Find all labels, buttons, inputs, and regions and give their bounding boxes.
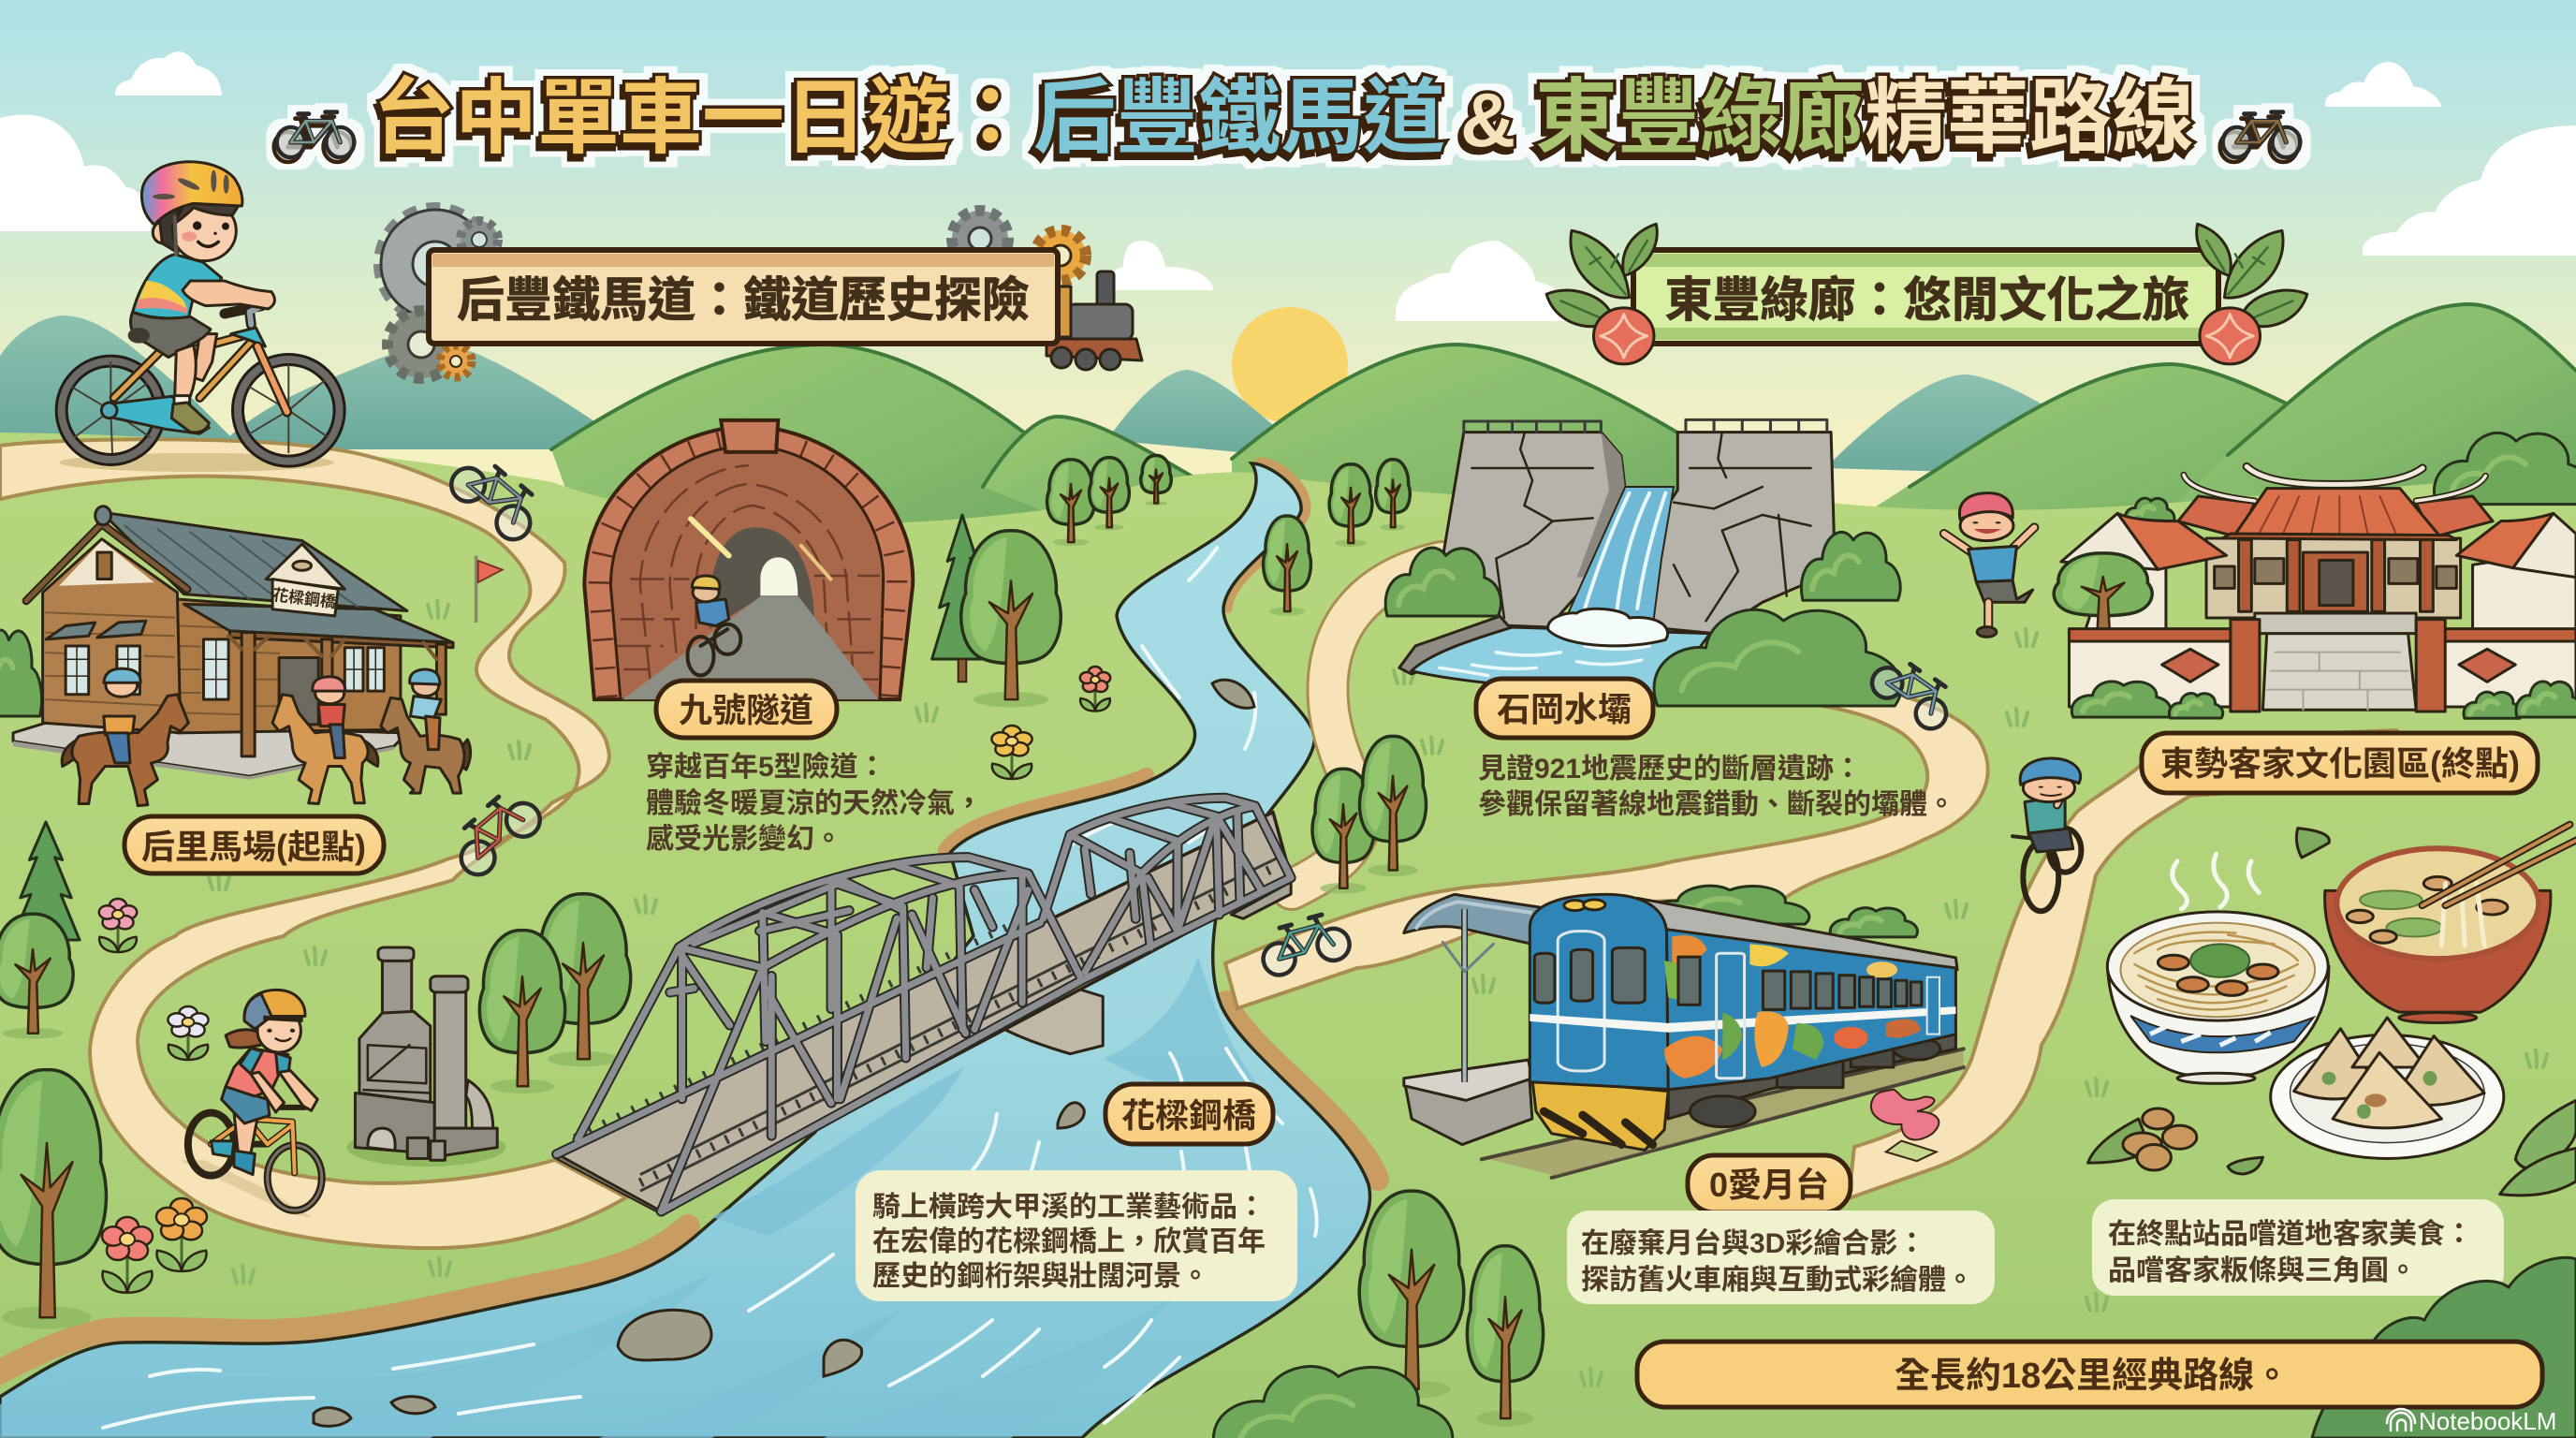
title: 台中單車一日遊： [373, 71, 1032, 164]
shorts [131, 312, 211, 358]
background trees [0, 456, 1427, 1328]
grass tufts [209, 554, 2547, 1386]
foam [1548, 609, 1668, 646]
route paths [0, 439, 2452, 1248]
lead cyclist [59, 162, 340, 472]
courtyard wall right [2444, 630, 2576, 707]
platform canopy [1404, 894, 1540, 944]
banner plaque [429, 250, 1058, 344]
path: bridge to dam [1225, 674, 1988, 1008]
flag [476, 556, 503, 623]
banner plaque [1633, 250, 2218, 344]
route length bar [1637, 1342, 2542, 1407]
label: 石岡水壩 [1476, 679, 1653, 738]
icon: steam locomotive [1046, 271, 1142, 370]
head [153, 222, 171, 243]
title [277, 71, 2300, 164]
main roof [2234, 489, 2440, 536]
small cyclist in tunnel [687, 576, 740, 675]
side door [1717, 953, 1745, 1078]
horse 2 with rider [272, 677, 378, 804]
triangle dumplings [2294, 1018, 2484, 1128]
path: along dam [1292, 562, 1442, 889]
NotebookLM watermark: NotebookLM [2419, 1407, 2556, 1435]
wing walls [2086, 555, 2166, 630]
keystone [721, 420, 778, 452]
red noodle bowl [2325, 890, 2551, 1012]
jersey [226, 1049, 288, 1096]
ranch sign text: 花樑鋼橋 [271, 586, 337, 611]
painted characters [1664, 935, 1921, 1078]
water highlights [103, 548, 1317, 1428]
text: bridge description: 騎上橫跨大甲溪的工業藝術品： [872, 1192, 1266, 1223]
undercarriage [1668, 1034, 1955, 1119]
near hills [551, 304, 2576, 580]
door [279, 657, 318, 725]
Old factory ruins [347, 947, 505, 1167]
waving cyclist [2012, 758, 2081, 911]
icon: bicycle right of title [2223, 112, 2300, 157]
bike frame [108, 396, 209, 433]
piers [1004, 989, 1103, 1054]
path: start to bridge [0, 439, 626, 1248]
windows [66, 639, 384, 699]
deck [557, 813, 1291, 1211]
wing roofs [2117, 513, 2227, 569]
text: tunnel description: 感受光影變幻。 [646, 823, 842, 855]
rear wheel [62, 361, 160, 460]
Shigang Dam [1385, 419, 1901, 706]
tunnel interior [709, 527, 814, 629]
side windows [1763, 971, 1922, 1009]
darker water patches [0, 955, 1273, 1438]
pool [1412, 627, 1710, 695]
text: tunnel description [646, 752, 983, 855]
cross gable [266, 544, 344, 589]
upper side roofs [2178, 496, 2255, 537]
girl cyclist [180, 990, 322, 1218]
pilot stripes [1532, 1078, 1668, 1150]
section banner left: 后豐鐵馬道 [381, 210, 1142, 378]
steam [2173, 854, 2259, 909]
nuts and leaves [2088, 1119, 2150, 1163]
text: platform description: 在廢棄月台與3D彩繪合影： [1581, 1227, 1925, 1259]
banner title: 東豐綠廊：悠閒文化之旅 [1664, 273, 2190, 327]
front cab [1530, 894, 1668, 1090]
arm [251, 1071, 317, 1112]
label: 后里馬場 [124, 816, 384, 873]
label: 花樑鋼橋: 花樑鋼橋 [1121, 1096, 1256, 1135]
label: 九號隧道: 九號隧道 [679, 691, 813, 729]
gable [43, 539, 181, 733]
foreground trees and bushes [1213, 1191, 2576, 1438]
icon: bicycle left of title [277, 112, 354, 157]
path: platform to park [1849, 730, 2452, 1198]
flowers [99, 667, 1110, 1293]
text: tunnel description: 穿越百年5型險道： [646, 752, 886, 783]
front leg and shoe [175, 345, 196, 396]
far mountains [0, 315, 2153, 477]
porch posts [242, 633, 446, 756]
text: dam description: 見證921地震歷史的斷層遺跡： [1478, 754, 1862, 785]
running boy [1944, 493, 2034, 637]
dam railings [1464, 419, 1827, 433]
sky background [0, 0, 2576, 524]
Houli horse ranch [13, 506, 471, 806]
text: dam description: 參觀保留著線地震錯動、斷裂的壩體。 [1478, 789, 1955, 820]
pink flower creature [1871, 1090, 1939, 1139]
front wheel [238, 360, 340, 462]
title: 后豐鐵馬道 [1033, 71, 1445, 164]
horse 3 with rider [381, 669, 471, 793]
walkway [2262, 634, 2416, 710]
courtyard wall left [2069, 630, 2231, 707]
river [0, 463, 1369, 1438]
No.9 tunnel [584, 420, 913, 699]
ground [0, 433, 2576, 1438]
river bank soil [0, 462, 1378, 1376]
Hakka cultural park [2054, 433, 2576, 718]
corner bush [2312, 1257, 2576, 1438]
river rocks [314, 680, 1254, 1426]
diamond ornaments [2162, 649, 2218, 682]
text: food description [2092, 1199, 2504, 1296]
leg and shoe [234, 1109, 259, 1153]
label: 0愛月台: 0愛月台 [1709, 1166, 1829, 1204]
text: bridge description [856, 1170, 1297, 1301]
truss frame [557, 798, 1291, 1211]
gate posts [2231, 620, 2260, 712]
label: 東勢客家文化園區 [2142, 733, 2538, 793]
waterfall [1565, 487, 1674, 621]
dam left block [1443, 433, 1625, 627]
icon: gears [381, 210, 1086, 378]
text: bridge description: 歷史的鋼桁架與壯闊河景。 [872, 1261, 1209, 1292]
route length bar: 全長約18公里經典路線。 [1895, 1357, 2290, 1396]
trail bicycles [444, 448, 1961, 978]
title: 東豐綠廊 [1535, 71, 1865, 164]
face [193, 221, 201, 230]
text: food description: 在終點站品嚐道地客家美食： [2108, 1219, 2473, 1250]
icon: tea leaves and red kueh, left [1546, 224, 1657, 364]
deck railing [640, 865, 1279, 1182]
horse 1 with rider [62, 668, 188, 806]
roof [1637, 898, 1957, 970]
text: platform description: 探訪舊火車廂與互動式彩繪體。 [1581, 1265, 1974, 1296]
text: tunnel description: 體驗冬暖夏涼的天然冷氣， [646, 788, 983, 819]
label: 九號隧道 [656, 681, 837, 738]
main hall [2206, 538, 2461, 618]
icon: tea leaves and red kueh, right [2197, 224, 2307, 364]
white stripe [1530, 1006, 1955, 1033]
arm [183, 281, 274, 309]
title: 精華路線 [1865, 71, 2194, 164]
sun [1232, 307, 1348, 423]
Love Moon platform: painted train [1404, 886, 1964, 1178]
plate [2271, 1034, 2504, 1158]
rock at dam foot [1399, 615, 1553, 674]
tree in front of wing [2054, 553, 2152, 637]
Flower-beam steel bridge [555, 798, 1291, 1215]
label: 0愛月台 [1688, 1155, 1851, 1212]
white noodle bowl [2107, 966, 2329, 1075]
label: 石岡水壩: 石岡水壩 [1497, 690, 1632, 728]
wings [177, 599, 401, 733]
back leg [194, 334, 217, 381]
bushes at wall [2071, 682, 2171, 717]
label: 東勢客家文化園區: 東勢客家文化園區(終點) [2160, 744, 2520, 783]
carriage side [1653, 928, 1955, 1090]
tracks [1482, 1049, 1964, 1178]
section banner right: 東豐綠廊 [1546, 224, 2307, 364]
banner title: 后豐鐵馬道：鐵道歷史探險 [457, 273, 1030, 327]
text: dam description [1478, 754, 1955, 820]
wheels [188, 1113, 234, 1176]
text: bridge description: 在宏偉的花樑鋼橋上，欣賞百年 [872, 1226, 1266, 1257]
dam right block [1649, 433, 1835, 634]
porch roof [183, 604, 453, 642]
jersey [133, 255, 222, 318]
text: food description: 品嚐客家粄條與三角圓。 [2108, 1255, 2417, 1286]
hair, head, helmet [226, 1030, 268, 1048]
platform [13, 723, 407, 776]
clouds [0, 51, 2576, 321]
shorts [222, 1087, 270, 1123]
label: 后里馬場: 后里馬場(起點) [141, 828, 366, 866]
rainbow helmet [141, 162, 242, 225]
Hakka food [2088, 825, 2576, 1196]
roofs [102, 512, 407, 610]
platform [1404, 1060, 1532, 1145]
label: 花樑鋼橋 [1105, 1084, 1273, 1144]
dam cracks [1471, 433, 1811, 621]
chopsticks [2422, 825, 2576, 905]
title: & [1460, 78, 1515, 163]
text: platform description [1567, 1211, 1995, 1304]
tunnel arch [584, 425, 913, 699]
bushes [1385, 548, 1500, 616]
sign board [272, 580, 338, 616]
frame [211, 1119, 295, 1173]
